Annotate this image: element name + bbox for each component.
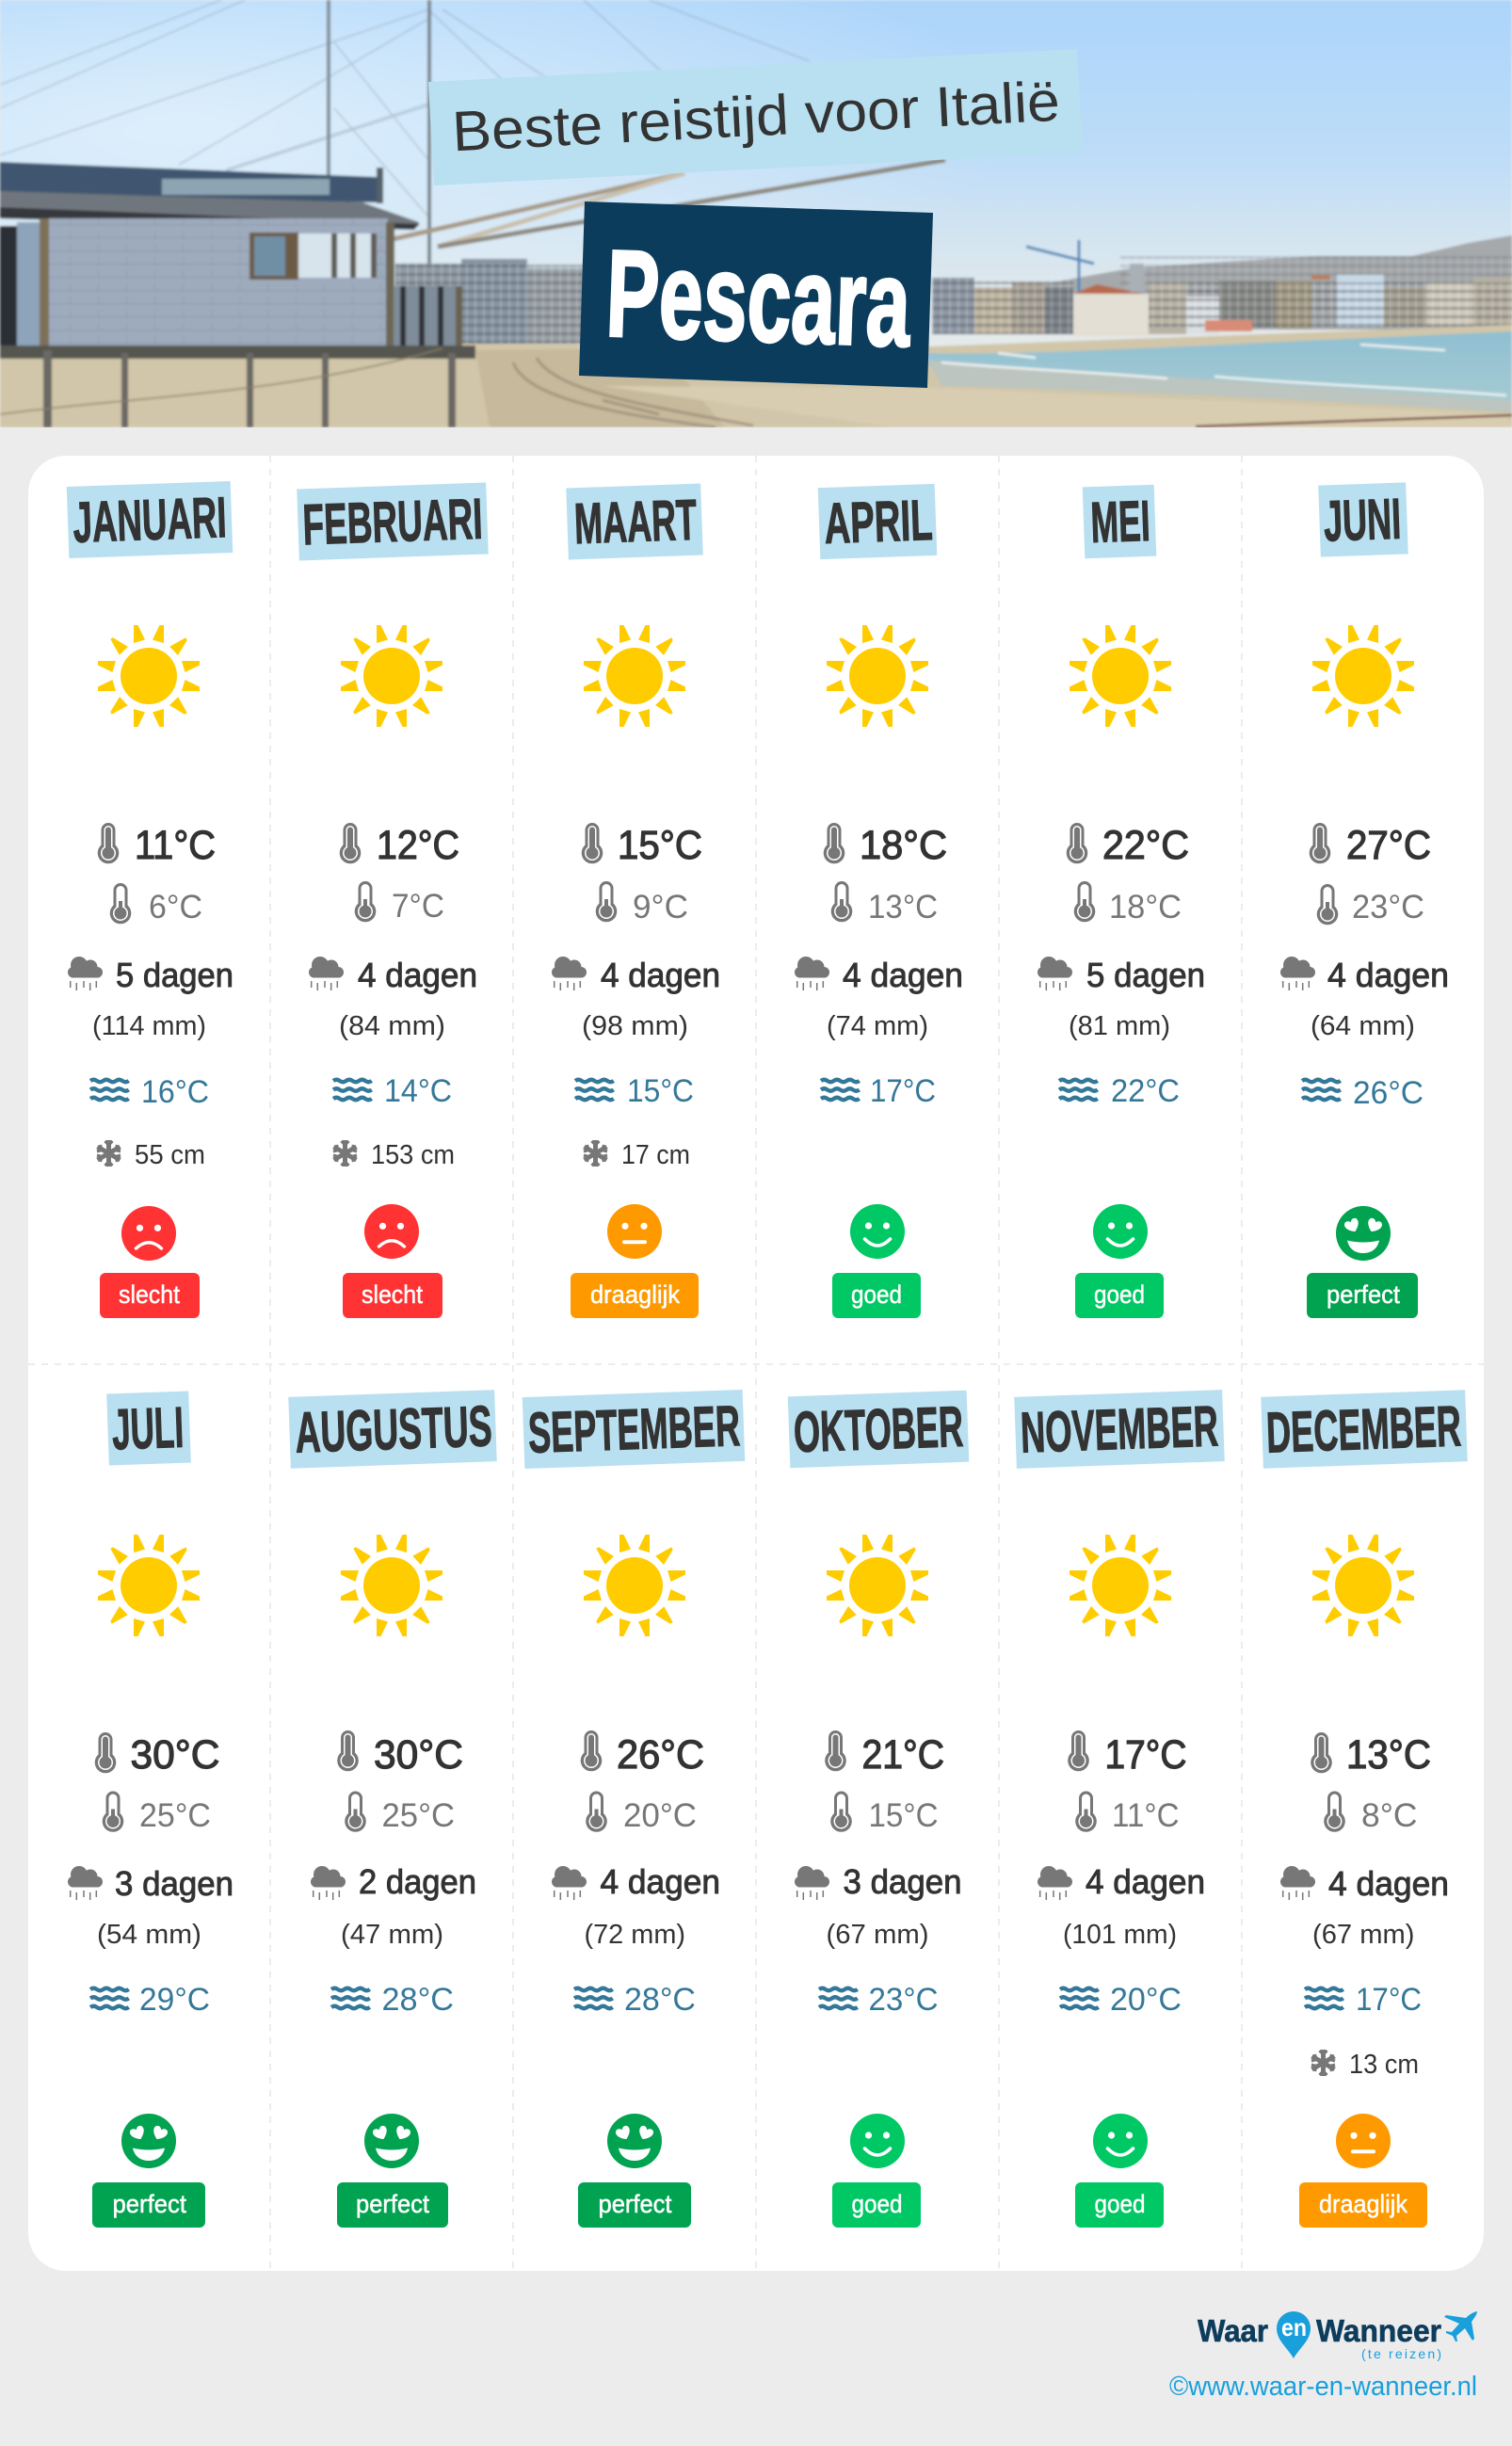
rain days: 5 dagen bbox=[1086, 956, 1205, 994]
rating badge: goed bbox=[1094, 2190, 1145, 2218]
month heading: FEBRUARI bbox=[301, 487, 484, 556]
icon: waves bbox=[331, 1988, 370, 2008]
max temperature: 13°C bbox=[1346, 1732, 1431, 1778]
rainfall: (84 mm) bbox=[339, 1011, 445, 1041]
min temperature: 13°C bbox=[868, 889, 938, 925]
min temperature: 25°C bbox=[382, 1797, 455, 1834]
rating badge: draaglijk bbox=[590, 1280, 680, 1309]
sea temperature: 17°C bbox=[1356, 1982, 1422, 2018]
sea temperature: 16°C bbox=[141, 1074, 209, 1110]
rating badge bbox=[571, 1273, 699, 1318]
logo: Waar en Wanneer bbox=[1198, 2311, 1477, 2361]
icon: sun bbox=[1312, 1535, 1414, 1636]
icon: rain bbox=[309, 957, 344, 990]
icon: neutral face bbox=[1336, 2114, 1391, 2168]
icon: sun bbox=[584, 1535, 685, 1636]
month heading bbox=[788, 1391, 969, 1468]
rating badge bbox=[832, 2182, 921, 2228]
sea temperature: 23°C bbox=[868, 1982, 938, 2018]
rating badge bbox=[100, 1273, 200, 1318]
icon: snowflake bbox=[97, 1140, 121, 1167]
month heading: JANUARI bbox=[72, 485, 228, 555]
rainfall: (72 mm) bbox=[584, 1920, 685, 1950]
max temperature: 21°C bbox=[862, 1732, 944, 1778]
icon: happy face bbox=[1093, 1204, 1148, 1259]
min temperature: 25°C bbox=[139, 1797, 211, 1834]
hut clerestory bbox=[0, 162, 377, 202]
panel: augustus bbox=[288, 1390, 497, 2228]
max temperature: 30°C bbox=[130, 1732, 220, 1778]
logo word: Wanneer: Wanneer bbox=[1316, 2313, 1441, 2348]
rainfall: (54 mm) bbox=[97, 1920, 201, 1950]
rating badge: perfect bbox=[1327, 1280, 1400, 1309]
crane bbox=[1026, 240, 1094, 301]
max temperature: 17°C bbox=[1105, 1732, 1186, 1778]
icon: rain bbox=[1037, 1866, 1072, 1900]
icon: sun bbox=[341, 1535, 442, 1636]
rating badge bbox=[1307, 1273, 1418, 1318]
railing bbox=[394, 286, 461, 346]
rain days: 3 dagen bbox=[844, 1862, 962, 1901]
panel: mei bbox=[1037, 485, 1205, 1318]
poles of fishing structure bbox=[392, 160, 947, 250]
month heading bbox=[67, 481, 233, 558]
min temperature: 18°C bbox=[1109, 889, 1182, 925]
snowfall: 17 cm bbox=[621, 1140, 690, 1170]
icon: airplane bbox=[1444, 2311, 1477, 2341]
icon: waves bbox=[1060, 1988, 1099, 2008]
rain days: 4 dagen bbox=[843, 956, 963, 994]
icon: min thermometer bbox=[1074, 881, 1095, 922]
icon: sad face bbox=[121, 1206, 176, 1261]
icon: love-eyes face bbox=[364, 2114, 419, 2168]
panel: oktober bbox=[788, 1391, 969, 2228]
rain days: 4 dagen bbox=[1328, 1864, 1449, 1903]
month heading bbox=[288, 1390, 497, 1469]
icon: rain bbox=[795, 1866, 829, 1900]
icon: sun bbox=[1070, 625, 1171, 727]
rating badge bbox=[1075, 1273, 1164, 1318]
icon: min thermometer bbox=[1317, 884, 1338, 925]
icon: rain bbox=[1280, 957, 1315, 990]
sand bbox=[0, 325, 1512, 427]
min temperature: 9°C bbox=[633, 889, 688, 925]
sea temperature: 28°C bbox=[382, 1982, 454, 2018]
max temperature: 11°C bbox=[135, 823, 216, 868]
month heading: APRIL bbox=[823, 488, 934, 555]
icon: waves bbox=[575, 1080, 614, 1100]
sea temperature: 22°C bbox=[1111, 1073, 1180, 1109]
rainfall: (98 mm) bbox=[582, 1011, 688, 1041]
rainfall: (74 mm) bbox=[827, 1011, 928, 1041]
icon: min thermometer bbox=[586, 1791, 607, 1832]
sea temperature: 29°C bbox=[139, 1982, 210, 2018]
rainfall: (67 mm) bbox=[827, 1920, 928, 1950]
icon: min thermometer bbox=[1324, 1791, 1345, 1832]
panel: juni bbox=[1280, 482, 1449, 1318]
month heading: AUGUSTUS bbox=[294, 1393, 493, 1465]
sea temperature: 15°C bbox=[627, 1073, 694, 1109]
panel: september bbox=[523, 1390, 745, 2228]
max temperature: 18°C bbox=[860, 823, 947, 868]
icon: sun bbox=[584, 625, 685, 727]
icon: min thermometer bbox=[831, 881, 852, 922]
icon: rain bbox=[552, 1866, 587, 1900]
rain days: 4 dagen bbox=[601, 1862, 720, 1901]
month heading: JULI bbox=[111, 1395, 185, 1461]
month heading bbox=[1318, 482, 1408, 557]
bottom wet sand bbox=[603, 386, 1512, 427]
rating badge: slecht bbox=[119, 1280, 180, 1309]
rain days: 2 dagen bbox=[359, 1862, 476, 1901]
icon: min thermometer bbox=[103, 1791, 123, 1832]
rating badge: goed bbox=[851, 2190, 902, 2218]
icon: min thermometer bbox=[110, 883, 131, 924]
month heading: MEI bbox=[1089, 489, 1151, 555]
sea temperature: 26°C bbox=[1353, 1075, 1424, 1111]
hut wall bbox=[45, 218, 388, 346]
sea bbox=[927, 331, 1512, 403]
max temperature: 22°C bbox=[1102, 823, 1189, 868]
rain days: 4 dagen bbox=[358, 956, 477, 994]
icon: rain bbox=[1280, 1866, 1315, 1900]
icon: sun bbox=[1070, 1535, 1171, 1636]
rain days: 3 dagen bbox=[115, 1864, 233, 1903]
min temperature: 7°C bbox=[392, 888, 444, 925]
panel: april bbox=[795, 484, 963, 1318]
icon: max thermometer bbox=[1068, 1730, 1089, 1771]
sea temperature: 17°C bbox=[870, 1073, 936, 1109]
snowfall: 13 cm bbox=[1349, 2050, 1419, 2080]
sea temperature: 20°C bbox=[1110, 1982, 1182, 2018]
rating badge: perfect bbox=[599, 2190, 672, 2218]
min temperature: 11°C bbox=[1112, 1797, 1179, 1834]
city name box bbox=[579, 201, 933, 388]
panel: februari bbox=[297, 483, 489, 1318]
rainfall: (101 mm) bbox=[1063, 1920, 1177, 1950]
icon: rain bbox=[1037, 957, 1072, 990]
icon: waves bbox=[819, 1988, 858, 2008]
icon: min thermometer bbox=[596, 881, 617, 922]
icon: rain bbox=[311, 1866, 346, 1900]
icon: waves bbox=[574, 1988, 613, 2008]
header photo: Pescara beach with fishing hut bbox=[0, 0, 1512, 427]
rating badge bbox=[343, 1273, 442, 1318]
icon: rain bbox=[68, 957, 103, 990]
max temperature: 15°C bbox=[618, 823, 702, 868]
icon: snowflake bbox=[584, 1140, 607, 1167]
icon: sun bbox=[827, 1535, 928, 1636]
icon: waves bbox=[90, 1988, 129, 2008]
month heading bbox=[566, 484, 703, 559]
sea temperature: 28°C bbox=[624, 1982, 696, 2018]
icon: max thermometer bbox=[825, 1730, 846, 1771]
rain days: 5 dagen bbox=[116, 956, 233, 994]
left-side blocks behind hut bbox=[394, 262, 463, 288]
month heading: OKTOBER bbox=[793, 1394, 964, 1464]
icon: location pin bbox=[1277, 2311, 1311, 2358]
icon: waves bbox=[1302, 1080, 1341, 1100]
hut roof bbox=[0, 191, 419, 226]
title banner bbox=[428, 49, 1083, 185]
max temperature: 30°C bbox=[374, 1732, 463, 1778]
month heading: MAART bbox=[573, 488, 698, 555]
icon: sad face bbox=[364, 1204, 419, 1259]
logo word: Waar: Waar bbox=[1198, 2313, 1268, 2348]
icon: max thermometer bbox=[95, 1732, 116, 1773]
min temperature: 8°C bbox=[1361, 1797, 1418, 1834]
month heading: NOVEMBER bbox=[1020, 1393, 1219, 1465]
deck and stilts bbox=[0, 346, 475, 359]
town buildings bbox=[932, 264, 1512, 336]
month heading bbox=[106, 1392, 191, 1465]
rain days: 4 dagen bbox=[1327, 956, 1449, 994]
rating badge: perfect bbox=[356, 2190, 429, 2218]
rating badge: draaglijk bbox=[1319, 2190, 1407, 2218]
icon: love-eyes face bbox=[607, 2114, 662, 2168]
rating badge bbox=[1299, 2182, 1427, 2228]
rating badge bbox=[832, 1273, 921, 1318]
icon: love-eyes face bbox=[1336, 1206, 1391, 1261]
icon: sun bbox=[827, 625, 928, 727]
icon: max thermometer bbox=[1311, 1732, 1332, 1773]
icon: min thermometer bbox=[345, 1791, 366, 1832]
icon: location pin: en bbox=[1281, 2313, 1307, 2341]
icon: sun bbox=[98, 1535, 200, 1636]
website url: ©www.waar-en-wanneer.nl bbox=[1169, 2372, 1477, 2402]
icon: max thermometer bbox=[1310, 823, 1330, 863]
icon: max thermometer bbox=[824, 823, 844, 863]
icon: happy face bbox=[1093, 2114, 1148, 2168]
title text: Beste reistijd voor Italië bbox=[451, 70, 1061, 163]
icon: happy face bbox=[850, 1204, 905, 1259]
rainfall: (114 mm) bbox=[92, 1011, 206, 1041]
max temperature: 12°C bbox=[377, 823, 459, 868]
far hills behind town bbox=[1026, 235, 1512, 330]
icon: min thermometer bbox=[830, 1791, 852, 1832]
rain days: 4 dagen bbox=[1086, 1862, 1205, 1901]
rating badge: perfect bbox=[113, 2190, 186, 2218]
icon: sun bbox=[98, 625, 200, 727]
icon: waves bbox=[333, 1080, 372, 1100]
max temperature: 27°C bbox=[1346, 823, 1431, 868]
month heading bbox=[523, 1390, 745, 1469]
icon: max thermometer bbox=[581, 1730, 602, 1771]
rating badge: goed bbox=[851, 1280, 902, 1309]
icon: min thermometer bbox=[355, 881, 376, 922]
icon: waves bbox=[1059, 1080, 1098, 1100]
icon: sun bbox=[341, 625, 442, 727]
max temperature: 26°C bbox=[617, 1732, 704, 1778]
icon: waves bbox=[1305, 1988, 1343, 2008]
rating badge bbox=[337, 2182, 448, 2228]
min temperature: 20°C bbox=[623, 1797, 697, 1834]
min temperature: 6°C bbox=[149, 889, 202, 925]
icon: snowflake bbox=[333, 1140, 357, 1167]
month heading bbox=[818, 484, 937, 559]
icon: max thermometer bbox=[582, 823, 603, 863]
rainfall: (47 mm) bbox=[341, 1920, 443, 1950]
panel: maart bbox=[552, 484, 720, 1318]
min temperature: 23°C bbox=[1352, 889, 1424, 925]
icon: rain bbox=[795, 957, 829, 990]
month heading bbox=[1014, 1390, 1225, 1469]
icon: waves bbox=[90, 1080, 129, 1100]
panel: november bbox=[1014, 1390, 1225, 2228]
icon: max thermometer bbox=[98, 823, 119, 863]
icon: max thermometer bbox=[1067, 823, 1087, 863]
icon: rain bbox=[68, 1866, 103, 1900]
icon: waves bbox=[821, 1080, 860, 1100]
logo tagline: (te reizen) bbox=[1361, 2346, 1441, 2361]
rainfall: (67 mm) bbox=[1312, 1920, 1414, 1950]
icon: snowflake bbox=[1311, 2050, 1335, 2076]
icon: rain bbox=[552, 957, 587, 990]
rainfall: (81 mm) bbox=[1069, 1011, 1170, 1041]
panel: december bbox=[1261, 1390, 1468, 2228]
month heading bbox=[1083, 485, 1156, 558]
icon: min thermometer bbox=[1075, 1791, 1097, 1832]
min temperature: 15°C bbox=[868, 1797, 938, 1834]
month heading bbox=[297, 483, 489, 560]
rating badge bbox=[578, 2182, 691, 2228]
snowfall: 55 cm bbox=[135, 1140, 205, 1170]
rating badge: slecht bbox=[362, 1280, 423, 1309]
rainfall: (64 mm) bbox=[1311, 1011, 1415, 1041]
city name: Pescara bbox=[604, 223, 913, 373]
snowfall: 153 cm bbox=[371, 1140, 455, 1170]
rain days: 4 dagen bbox=[601, 956, 720, 994]
panel: juli bbox=[68, 1392, 233, 2228]
panel: januari bbox=[67, 481, 233, 1318]
sea temperature: 14°C bbox=[384, 1073, 452, 1109]
rating badge bbox=[92, 2182, 205, 2228]
icon: max thermometer bbox=[337, 1730, 359, 1771]
icon: max thermometer bbox=[340, 823, 361, 863]
icon: sun bbox=[1312, 625, 1414, 727]
rating badge: goed bbox=[1094, 1280, 1145, 1309]
icon: happy face bbox=[850, 2114, 905, 2168]
month heading: SEPTEMBER bbox=[527, 1393, 741, 1465]
rating badge bbox=[1075, 2182, 1164, 2228]
white calendar card bbox=[28, 456, 1484, 2271]
icon: neutral face bbox=[607, 1204, 662, 1259]
icon: love-eyes face bbox=[121, 2114, 176, 2168]
month heading: JUNI bbox=[1323, 487, 1402, 553]
